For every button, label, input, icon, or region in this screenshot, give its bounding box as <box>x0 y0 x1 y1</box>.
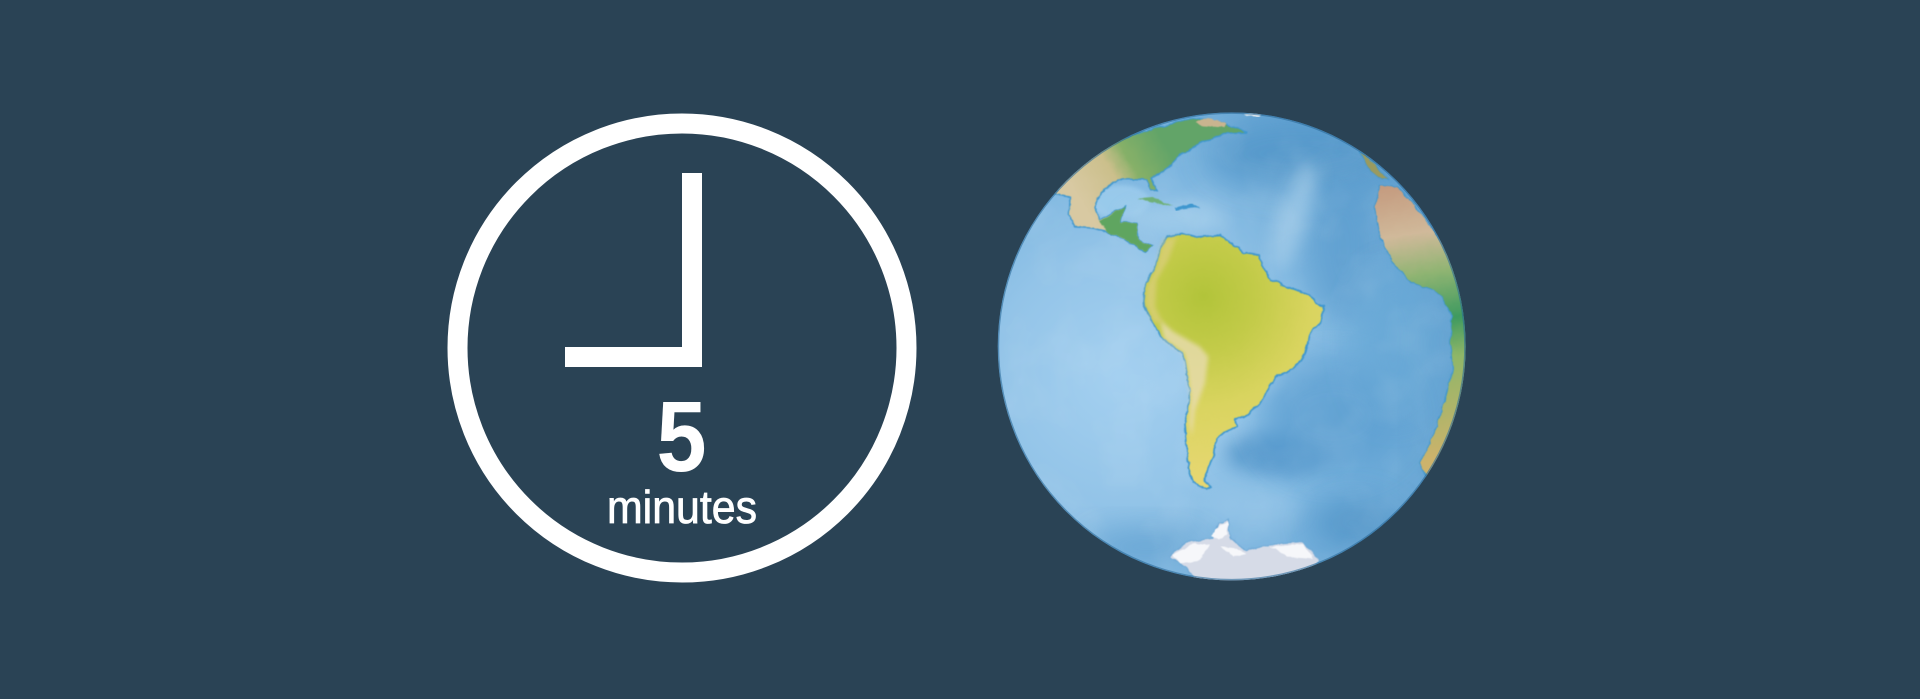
antarctica <box>1170 518 1320 580</box>
caribbean islands <box>1138 197 1200 211</box>
antarctica highlights <box>1173 522 1313 563</box>
ocean <box>998 112 1466 580</box>
arctic islands <box>1193 118 1227 127</box>
ocean shading <box>1087 117 1430 563</box>
south america <box>1143 233 1323 489</box>
north america <box>1053 118 1247 253</box>
europe <box>1360 152 1388 180</box>
clock hands <box>565 173 702 367</box>
ocean mottling <box>1167 135 1443 568</box>
greenland tip <box>1243 113 1262 117</box>
andes highlight <box>1160 320 1208 437</box>
number 5: 5 <box>656 382 707 493</box>
globe edge <box>998 113 1465 580</box>
central america green <box>1099 207 1153 253</box>
minutes label: minutes <box>607 481 757 533</box>
africa <box>1373 184 1466 476</box>
clock icon <box>458 124 906 572</box>
northwest coast tint <box>1145 237 1177 323</box>
clock ring <box>458 124 906 572</box>
earth globe <box>993 110 1480 590</box>
infographic canvas <box>448 112 1466 582</box>
